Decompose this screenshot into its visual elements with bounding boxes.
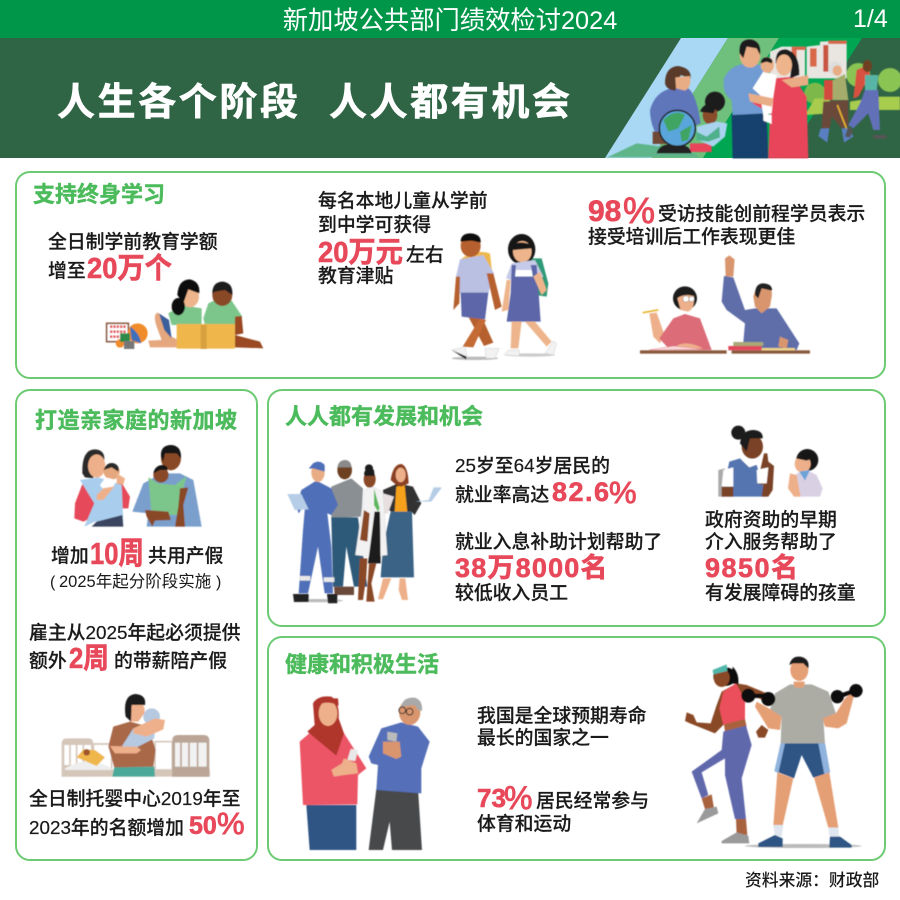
stat: infant care places: 50	[189, 812, 217, 840]
stat: life expectancy: 我国是全球预期寿命	[477, 704, 647, 726]
stat: education subsidy: 每名本地儿童从学前	[318, 190, 488, 211]
panel: healthy and active living	[268, 637, 885, 860]
stat: early intervention: 政府资助的早期	[705, 509, 837, 530]
illustration: people exercising	[685, 657, 863, 848]
stat: employment rate: %	[609, 475, 637, 510]
panel: lifelong learning	[16, 172, 885, 378]
stat: infant care places: 全日制托婴中心2019年至	[29, 788, 241, 809]
panel: family-friendly Singapore	[16, 390, 257, 860]
stat: workfare recipients	[455, 531, 662, 603]
panel frame	[16, 390, 257, 860]
heading: 人人都有发展和机会	[285, 404, 483, 429]
stat: education subsidy: 20万元	[318, 237, 403, 269]
stat: education subsidy: 教育津贴	[318, 265, 394, 286]
stat: employment rate: 25岁至64岁居民的	[455, 455, 610, 476]
stat: early intervention: 有发展障碍的孩童	[705, 582, 856, 603]
note: phased implementation: )	[216, 574, 221, 591]
stat: employment rate: 就业率高达	[455, 484, 549, 505]
hero banner	[0, 38, 900, 158]
stat: skillsfuture trainees: 受访技能创前程学员表示	[658, 203, 865, 224]
stat: skillsfuture trainees: 接受培训后工作表现更佳	[588, 226, 795, 247]
illustration: adult learners in class	[640, 255, 810, 354]
stat: workfare recipients: 38万8000名	[455, 553, 609, 583]
illustration: infant care	[62, 694, 210, 777]
stat: education subsidy: 到中学可获得	[318, 214, 431, 235]
stat: early intervention	[705, 509, 856, 603]
panel frame	[268, 637, 885, 860]
stat: skillsfuture trainees: 98	[588, 195, 621, 228]
heading: 支持终身学习	[33, 182, 165, 207]
stat: paternity leave	[29, 622, 241, 675]
stat: shared parental leave	[51, 536, 224, 571]
header bar	[0, 0, 900, 38]
stat: paternity leave: 额外	[29, 650, 67, 671]
stat: sports participation: 73	[477, 783, 506, 813]
illustration: workers	[287, 460, 442, 603]
stat: sports participation: %	[504, 780, 532, 816]
panel frame	[16, 172, 885, 378]
stat: infant care places	[29, 788, 245, 841]
stat: shared parental leave: 增加	[51, 545, 89, 566]
stat: paternity leave: 的带薪陪产假	[114, 650, 227, 671]
stat: preschool places: 20万个	[87, 252, 172, 285]
stat: infant care places: 2023年的名额增加	[29, 817, 184, 838]
stat: education subsidy	[318, 190, 488, 286]
main headline: 人生各个阶段	[57, 82, 301, 124]
stat: paternity leave: 2周	[69, 643, 109, 675]
stat: shared parental leave: 共用产假	[148, 545, 224, 566]
stat: sports participation	[477, 780, 649, 834]
stat: workfare recipients: 就业入息补助计划帮助了	[455, 531, 662, 552]
stat: preschool places: 增至	[48, 260, 86, 281]
illustration: seniors with phones	[300, 696, 430, 850]
stat: skillsfuture trainees: %	[623, 190, 655, 231]
illustration: schoolchildren walking	[452, 233, 557, 360]
note: phased implementation: 2025年起分阶段实施	[59, 572, 211, 591]
note: phased implementation: (	[50, 574, 56, 591]
illustration: parents with babies	[74, 445, 202, 527]
main headline part two: 人人都有机会	[329, 82, 573, 124]
stat: shared parental leave: 10周	[90, 536, 144, 571]
stat: sports participation: 体育和运动	[477, 813, 571, 834]
stat: life expectancy: 最长的国家之一	[477, 727, 609, 748]
panel frame	[268, 390, 885, 626]
stat: employment rate	[455, 455, 637, 510]
illustration: families and generations	[607, 39, 900, 158]
stat: sports participation: 居民经常参与	[536, 790, 649, 811]
panel: development and opportunity	[268, 390, 885, 626]
stat: preschool places: 全日制学前教育学额	[48, 231, 218, 252]
report title: 新加坡公共部门绩效检讨2024	[283, 7, 617, 35]
source note: 资料来源：财政部	[745, 871, 879, 890]
illustration: children reading	[107, 279, 263, 349]
stat: employment rate: 82.6	[552, 477, 611, 507]
stat: preschool places	[48, 231, 218, 285]
stat: skillsfuture trainees	[588, 190, 865, 247]
stat: life expectancy	[477, 704, 647, 748]
illustration: early intervention	[718, 426, 823, 497]
heading: 健康和积极生活	[285, 652, 439, 677]
page number: 1/4	[853, 5, 888, 33]
banner stripes	[605, 38, 862, 158]
stat: education subsidy: 左右	[406, 244, 444, 265]
stat: early intervention: 9850名	[705, 553, 800, 583]
stat: early intervention: 介入服务帮助了	[705, 531, 837, 552]
stat: infant care places: %	[217, 806, 245, 841]
stat: paternity leave: 雇主从2025年起必须提供	[29, 622, 241, 643]
heading: 打造亲家庭的新加坡	[35, 408, 237, 433]
stat: workfare recipients: 较低收入员工	[455, 582, 568, 603]
